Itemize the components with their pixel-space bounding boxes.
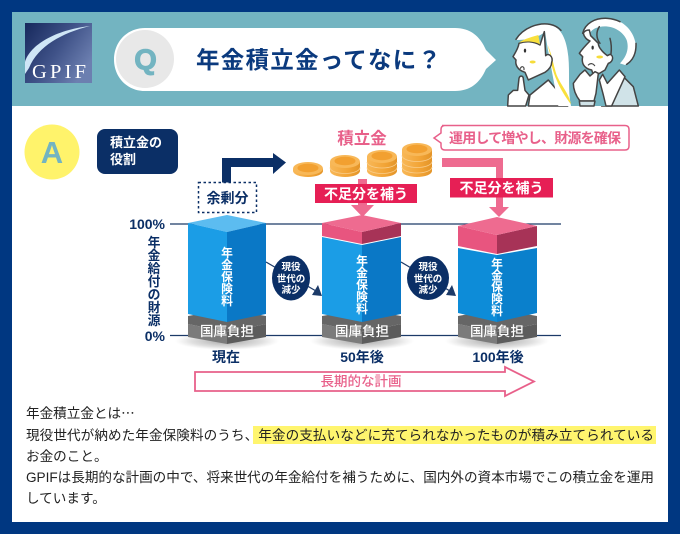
- decline arrow 2: 現役: [418, 261, 438, 273]
- blue block: 金: [491, 268, 503, 282]
- decline arrow 2: [401, 256, 456, 300]
- header band: [12, 12, 668, 106]
- blue block: 年: [221, 246, 233, 260]
- role label: 積立金の役割: 積立金の: [110, 135, 162, 150]
- pink arrow: reserve to 100 years: [442, 158, 509, 217]
- line 3: お金のこと。: [26, 449, 108, 464]
- answer badge: A: [41, 135, 63, 170]
- base: 国庫負担: [458, 309, 537, 344]
- shadow: [445, 332, 549, 350]
- coins: [293, 143, 432, 177]
- woman: [508, 24, 571, 106]
- long-term plan arrow: 長期的な計画: [320, 374, 402, 389]
- title: 年金積立金ってなに？: [196, 47, 441, 73]
- decline arrow 1: 世代の: [277, 273, 305, 285]
- blue block: 年: [356, 254, 368, 268]
- blue block: 金: [221, 258, 233, 272]
- coin stack 3: [367, 150, 397, 177]
- base: 国庫負担: [322, 309, 401, 344]
- base: 国庫負担: [188, 309, 266, 344]
- body text: [26, 402, 656, 506]
- base: 国庫負担: 国庫負担: [470, 323, 524, 339]
- GPIF logo: [25, 23, 92, 83]
- decline arrow 1: 現役: [281, 261, 301, 273]
- blue block: 保: [221, 270, 233, 284]
- label: 100年後: 100年後: [472, 349, 524, 365]
- surplus dashed box: 余剰分: [206, 190, 248, 206]
- long-term plan arrow: [195, 367, 534, 396]
- column: 100年後: [445, 217, 549, 365]
- coin stack 1: [293, 162, 323, 177]
- blue block: 金: [356, 266, 368, 280]
- label: 現在: 現在: [212, 349, 240, 365]
- axis lines: [170, 224, 561, 336]
- blue block: 年: [491, 257, 503, 271]
- blue block: 保: [356, 278, 368, 292]
- coin stack 2: [330, 155, 360, 177]
- callout: 運用して増やし、財源を確保: [434, 126, 629, 150]
- line 4: GPIFは長期的な計画の中で、将来世代の年金給付を補うために、国内外の資本市場でこの積立金を運用: [26, 470, 654, 485]
- shadow: [310, 332, 414, 350]
- shortfall label 2: 不足分を補う: [460, 180, 544, 196]
- decline arrow 1: 減少: [281, 284, 301, 296]
- reserve label: 積立金: [337, 128, 387, 148]
- shadow: [175, 332, 279, 350]
- axis label: 0%: 0%: [145, 328, 166, 344]
- dark arrow to reserve: [222, 153, 286, 185]
- blue block: [188, 215, 266, 322]
- decline arrow 1: [266, 256, 322, 300]
- pink arrow: reserve to 50 years: [351, 179, 374, 217]
- line 2: 現役世代が納めた年金保険料のうち、年金の支払いなどに充てられなかったものが積み立てられている: [26, 428, 654, 443]
- question speech bubble: [114, 28, 496, 91]
- base: 国庫負担: 国庫負担: [335, 323, 389, 339]
- axis title: 年金給付の財源: の: [148, 287, 160, 302]
- blue block: 保: [491, 280, 503, 294]
- icon: Q circle: Q: [134, 44, 157, 76]
- blue block: 険: [491, 292, 503, 306]
- surplus dashed box: [198, 182, 256, 212]
- axis title: 年金給付の財源: 源: [148, 313, 161, 328]
- column: 50年後: [310, 215, 414, 365]
- decline arrow 2: 減少: [418, 284, 438, 296]
- label: 50年後: 50年後: [340, 349, 384, 365]
- blue block: [458, 248, 537, 322]
- axis title: 年金給付の財源: 付: [148, 274, 161, 289]
- coin stack 4: [402, 143, 432, 177]
- blue block: 料: [356, 302, 368, 316]
- decline arrow 2: 世代の: [414, 273, 442, 285]
- axis title: 年金給付の財源: 年: [148, 235, 161, 250]
- role label: 積立金の役割: 役割: [110, 152, 136, 167]
- blue block: 険: [356, 290, 368, 304]
- white content panel: [12, 106, 668, 522]
- blue block: 料: [491, 304, 503, 318]
- highlight: [253, 426, 656, 444]
- axis title: 年金給付の財源: 給: [148, 261, 161, 276]
- shortfall label 1: 不足分を補う: [324, 186, 408, 202]
- blue block: [322, 237, 401, 322]
- line 5: しています。: [26, 491, 106, 506]
- axis title: 年金給付の財源: 財: [148, 300, 161, 315]
- column: 現在: [175, 215, 279, 365]
- role label: 積立金の役割: [97, 129, 178, 174]
- pink block: [322, 215, 401, 244]
- base: 国庫負担: 国庫負担: [200, 323, 254, 339]
- icon: Q circle: [116, 30, 174, 88]
- axis label: 100%: 100%: [129, 216, 166, 232]
- shortfall label 1: [315, 184, 417, 203]
- answer badge: [24, 124, 80, 180]
- illustration: two people thinking: [508, 18, 638, 106]
- shortfall label 2: [450, 178, 553, 198]
- blue block: 料: [221, 294, 233, 308]
- GPIF logo: GPIF: [32, 61, 86, 83]
- callout: 運用して増やし、財源を確保: 運用して増やし、財源を確保: [449, 130, 621, 146]
- man: [573, 18, 638, 106]
- blue block: 険: [221, 282, 233, 296]
- pink block: [458, 217, 537, 254]
- axis title: 年金給付の財源: 金: [148, 248, 161, 263]
- line 1: 年金積立金とは…: [26, 402, 135, 422]
